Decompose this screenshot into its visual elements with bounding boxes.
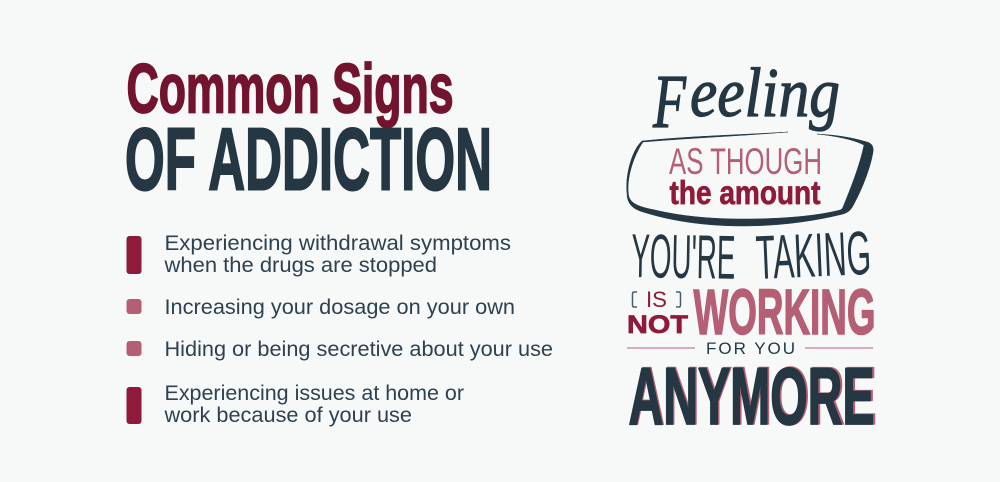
bullet 1 xyxy=(126,236,142,274)
sign 2 text: Increasing your dosage on your own xyxy=(164,295,515,319)
title line: Common Signs: Common Signs xyxy=(126,50,454,128)
sign 1 text: when the drugs are stopped xyxy=(163,253,437,277)
list of signs xyxy=(126,231,553,427)
quote panel xyxy=(627,55,876,442)
quote word: Feeling: F xyxy=(652,60,687,144)
bullet 4 xyxy=(126,387,142,424)
sign 4 text xyxy=(163,381,464,427)
quote word: anymore xyxy=(628,352,876,442)
quote panel: YOU'RE xyxy=(631,222,736,293)
sign 4 text: work because of your use xyxy=(163,403,412,427)
sign 3 text: Hiding or being secretive about your use xyxy=(164,337,553,361)
quote word: not: NOT xyxy=(627,311,688,339)
sign 1 text xyxy=(163,231,511,277)
sign 4 text: Experiencing issues at home or xyxy=(164,381,464,405)
right rule xyxy=(805,347,873,349)
bullet 2 xyxy=(126,299,142,314)
quote word: Feeling: eeling xyxy=(690,55,840,132)
brackets around is xyxy=(632,292,680,307)
title xyxy=(125,50,492,208)
title line: of addiction: OF ADDICTION xyxy=(125,110,492,208)
left rule xyxy=(627,347,695,349)
hand-drawn frame xyxy=(627,132,873,226)
bullet 3 xyxy=(126,341,142,356)
frame text: the amount: the amount xyxy=(670,174,821,211)
quote words: for you: FOR YOU xyxy=(706,339,795,358)
quote words: taking: TAKING xyxy=(755,219,873,293)
sign 1 text: Experiencing withdrawal symptoms xyxy=(164,231,511,255)
quote word: is: IS xyxy=(646,287,667,312)
frame text: as though: AS THOUGH xyxy=(669,141,822,182)
